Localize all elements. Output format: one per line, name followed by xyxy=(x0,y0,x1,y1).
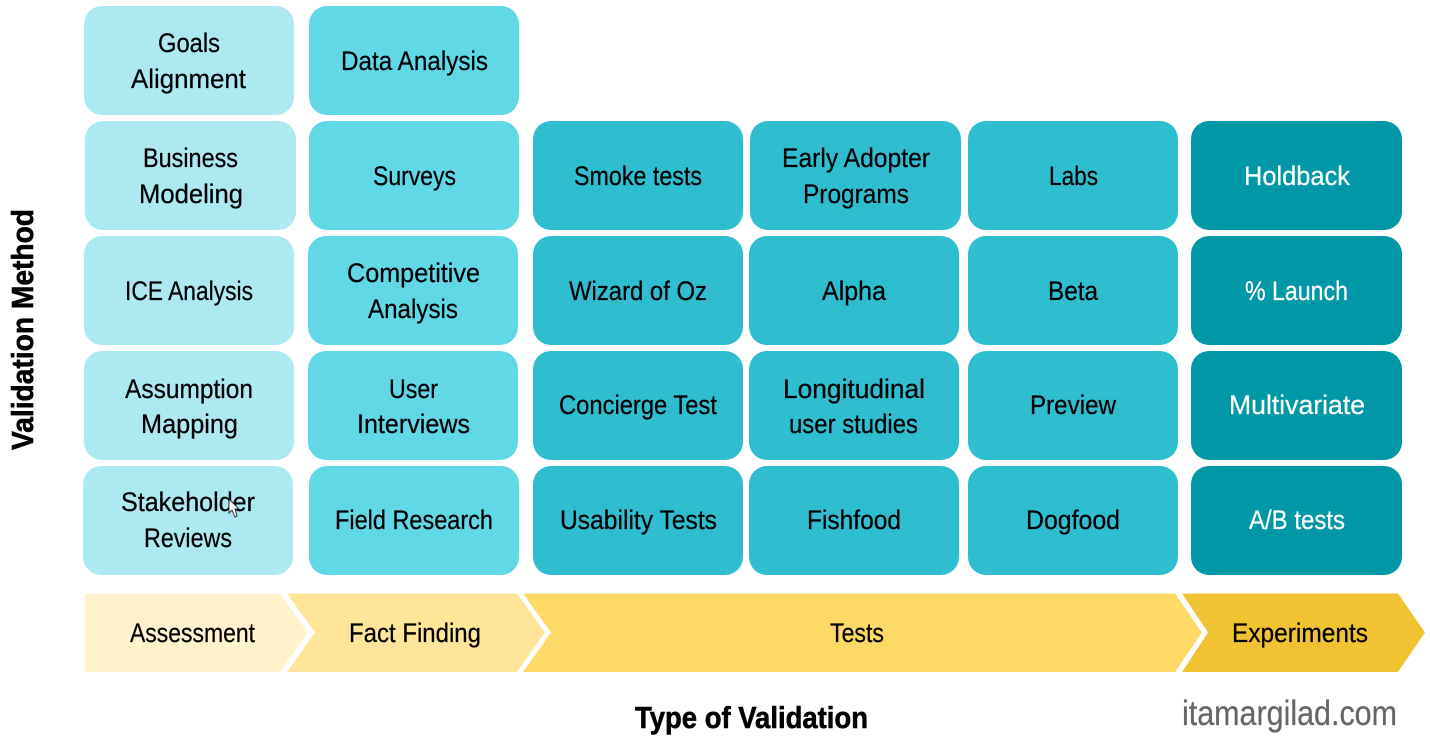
column: assessment methods xyxy=(83,6,296,575)
card: Longitudinal user studies xyxy=(749,351,959,460)
card: Wizard of Oz xyxy=(533,236,743,345)
card: Labs xyxy=(968,121,1178,230)
card: User Interviews: User xyxy=(389,374,438,404)
arrow: Assessment: Assessment xyxy=(130,618,255,648)
arrow: Fact Finding: Fact Finding xyxy=(349,618,481,648)
x axis title: Type of Validation xyxy=(635,700,868,735)
card: Smoke tests xyxy=(533,121,743,230)
card: Beta: Beta xyxy=(1048,276,1099,306)
card: Dogfood xyxy=(968,466,1178,575)
card: Competitive Analysis: Analysis xyxy=(368,294,458,324)
card: Longitudinal user studies: user studies xyxy=(789,409,918,439)
attribution: itamargilad.com xyxy=(1182,694,1397,733)
card: Competitive Analysis xyxy=(308,236,518,345)
card: User Interviews: Interviews xyxy=(357,409,470,439)
column: fact finding methods xyxy=(308,6,519,575)
card: Longitudinal user studies: Longitudinal xyxy=(783,374,925,404)
card: Goals Alignment xyxy=(84,6,294,115)
arrow: Assessment xyxy=(85,594,308,672)
card: Data Analysis xyxy=(309,6,519,115)
card: Early Adopter Programs: Early Adopter xyxy=(782,143,930,173)
card: User Interviews xyxy=(308,351,518,460)
card: Surveys xyxy=(309,121,519,230)
card: Usability Tests xyxy=(533,466,743,575)
card: Assumption Mapping: Assumption xyxy=(125,374,253,404)
card: Field Research xyxy=(309,466,519,575)
card: Fishfood xyxy=(749,466,959,575)
card: Business Modeling xyxy=(85,121,296,230)
card: A/B tests xyxy=(1191,466,1402,575)
card: A/B tests: A/B tests xyxy=(1249,505,1345,535)
card: Early Adopter Programs: Programs xyxy=(803,179,909,209)
card: % Launch xyxy=(1191,236,1402,345)
card: Business Modeling: Business xyxy=(143,143,238,173)
card: Usability Tests: Usability Tests xyxy=(560,505,717,535)
y axis title: Validation Method xyxy=(5,209,40,450)
card: Early Adopter Programs xyxy=(750,121,961,230)
card: ICE Analysis: ICE Analysis xyxy=(125,276,253,306)
card: Goals Alignment: Goals xyxy=(158,28,220,58)
card: Stakeholder Reviews xyxy=(83,466,293,575)
card: Smoke tests: Smoke tests xyxy=(574,161,702,191)
card: Concierge Test xyxy=(533,351,743,460)
card: Beta xyxy=(968,236,1178,345)
card: Stakeholder Reviews: Stakeholder xyxy=(121,487,255,517)
card: Labs: Labs xyxy=(1049,161,1098,191)
arrow: Fact Finding xyxy=(287,594,545,672)
card: Competitive Analysis: Competitive xyxy=(347,258,480,288)
card: Field Research: Field Research xyxy=(335,505,493,535)
card: Surveys: Surveys xyxy=(373,161,456,191)
arrow: Tests xyxy=(523,594,1202,672)
card: Fishfood: Fishfood xyxy=(807,505,901,535)
arrow: Experiments: Experiments xyxy=(1232,618,1368,648)
card: Multivariate xyxy=(1191,351,1402,460)
card: Preview: Preview xyxy=(1030,390,1116,420)
card: Assumption Mapping xyxy=(84,351,294,460)
card: Assumption Mapping: Mapping xyxy=(141,409,238,439)
card: Wizard of Oz: Wizard of Oz xyxy=(569,276,707,306)
card: Holdback xyxy=(1191,121,1402,230)
card: Business Modeling: Modeling xyxy=(139,179,243,209)
column: test methods xyxy=(533,121,1178,575)
arrow: Experiments xyxy=(1182,594,1425,672)
card: Alpha xyxy=(749,236,959,345)
card: Stakeholder Reviews: Reviews xyxy=(144,523,232,553)
card: Goals Alignment: Alignment xyxy=(131,64,246,94)
card: Multivariate: Multivariate xyxy=(1229,390,1365,420)
card: Data Analysis: Data Analysis xyxy=(341,46,488,76)
card: Holdback: Holdback xyxy=(1244,161,1350,191)
card: ICE Analysis xyxy=(84,236,294,345)
icon: mouse cursor xyxy=(229,499,239,517)
card: Dogfood: Dogfood xyxy=(1026,505,1120,535)
card: Alpha: Alpha xyxy=(822,276,887,306)
card: Preview xyxy=(968,351,1178,460)
column: experiment methods xyxy=(1191,121,1402,575)
arrow: Tests: Tests xyxy=(830,618,884,648)
card: Concierge Test: Concierge Test xyxy=(559,390,717,420)
card: % Launch: % Launch xyxy=(1245,276,1348,306)
